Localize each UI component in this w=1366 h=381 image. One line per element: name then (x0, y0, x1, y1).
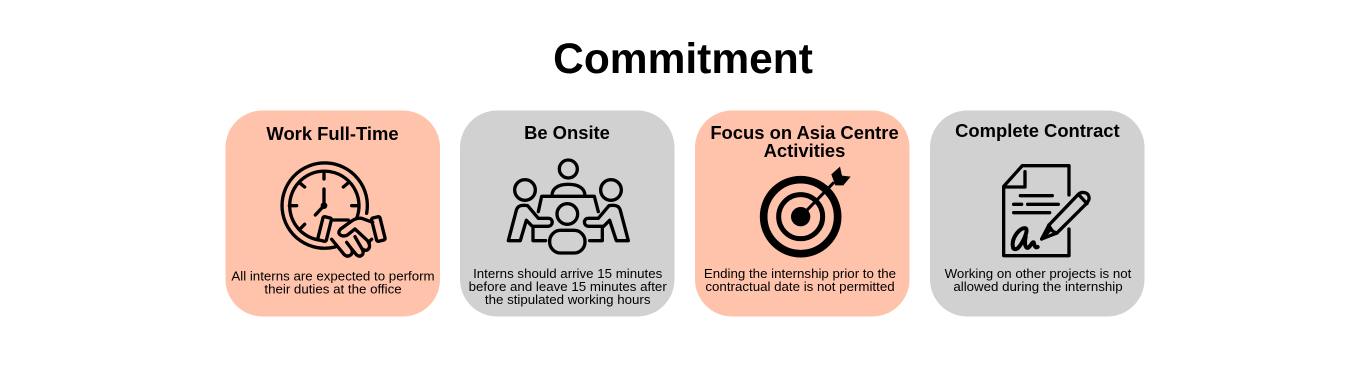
text: work full-time description: All interns are expected to perform (231, 269, 435, 284)
text: work full-time description: their duties at the office (264, 282, 402, 297)
heading: work full-time: Work Full-Time (266, 123, 399, 144)
heading: focus on asia centre activities: Activities (764, 140, 845, 161)
panel: complete contract (930, 110, 1144, 316)
text: complete contract description: allowed during the internship (953, 279, 1123, 294)
text: complete contract description: Working on other projects is not (945, 266, 1132, 281)
panel: be onsite (460, 110, 674, 316)
text: focus description: Ending the internship prior to the (704, 266, 896, 281)
text: focus description (704, 266, 896, 294)
heading: focus on asia centre activities: Focus on Asia Centre (710, 122, 899, 143)
text: be onsite description: Interns should arrive 15 minutes (473, 266, 663, 281)
panel: focus on asia centre activities (695, 110, 910, 316)
text: complete contract description (945, 266, 1132, 294)
title: Commitment (553, 36, 813, 83)
icon: clock and handshake (282, 163, 385, 256)
heading: be onsite: Be Onsite (524, 122, 610, 143)
text: work full-time description (231, 269, 435, 297)
heading: focus on asia centre activities (710, 122, 899, 161)
panel: work full-time (226, 110, 440, 316)
icon: signed contract (1004, 166, 1089, 256)
icon: target with arrow (764, 167, 851, 254)
heading: complete contract: Complete Contract (955, 120, 1120, 141)
text: be onsite description: before and leave 15 minutes after (469, 279, 667, 294)
text: be onsite description: the stipulated working hours (485, 292, 651, 307)
icon: meeting table (508, 160, 628, 253)
text: focus description: contractual date is not permitted (705, 279, 895, 294)
text: be onsite description (469, 266, 667, 307)
